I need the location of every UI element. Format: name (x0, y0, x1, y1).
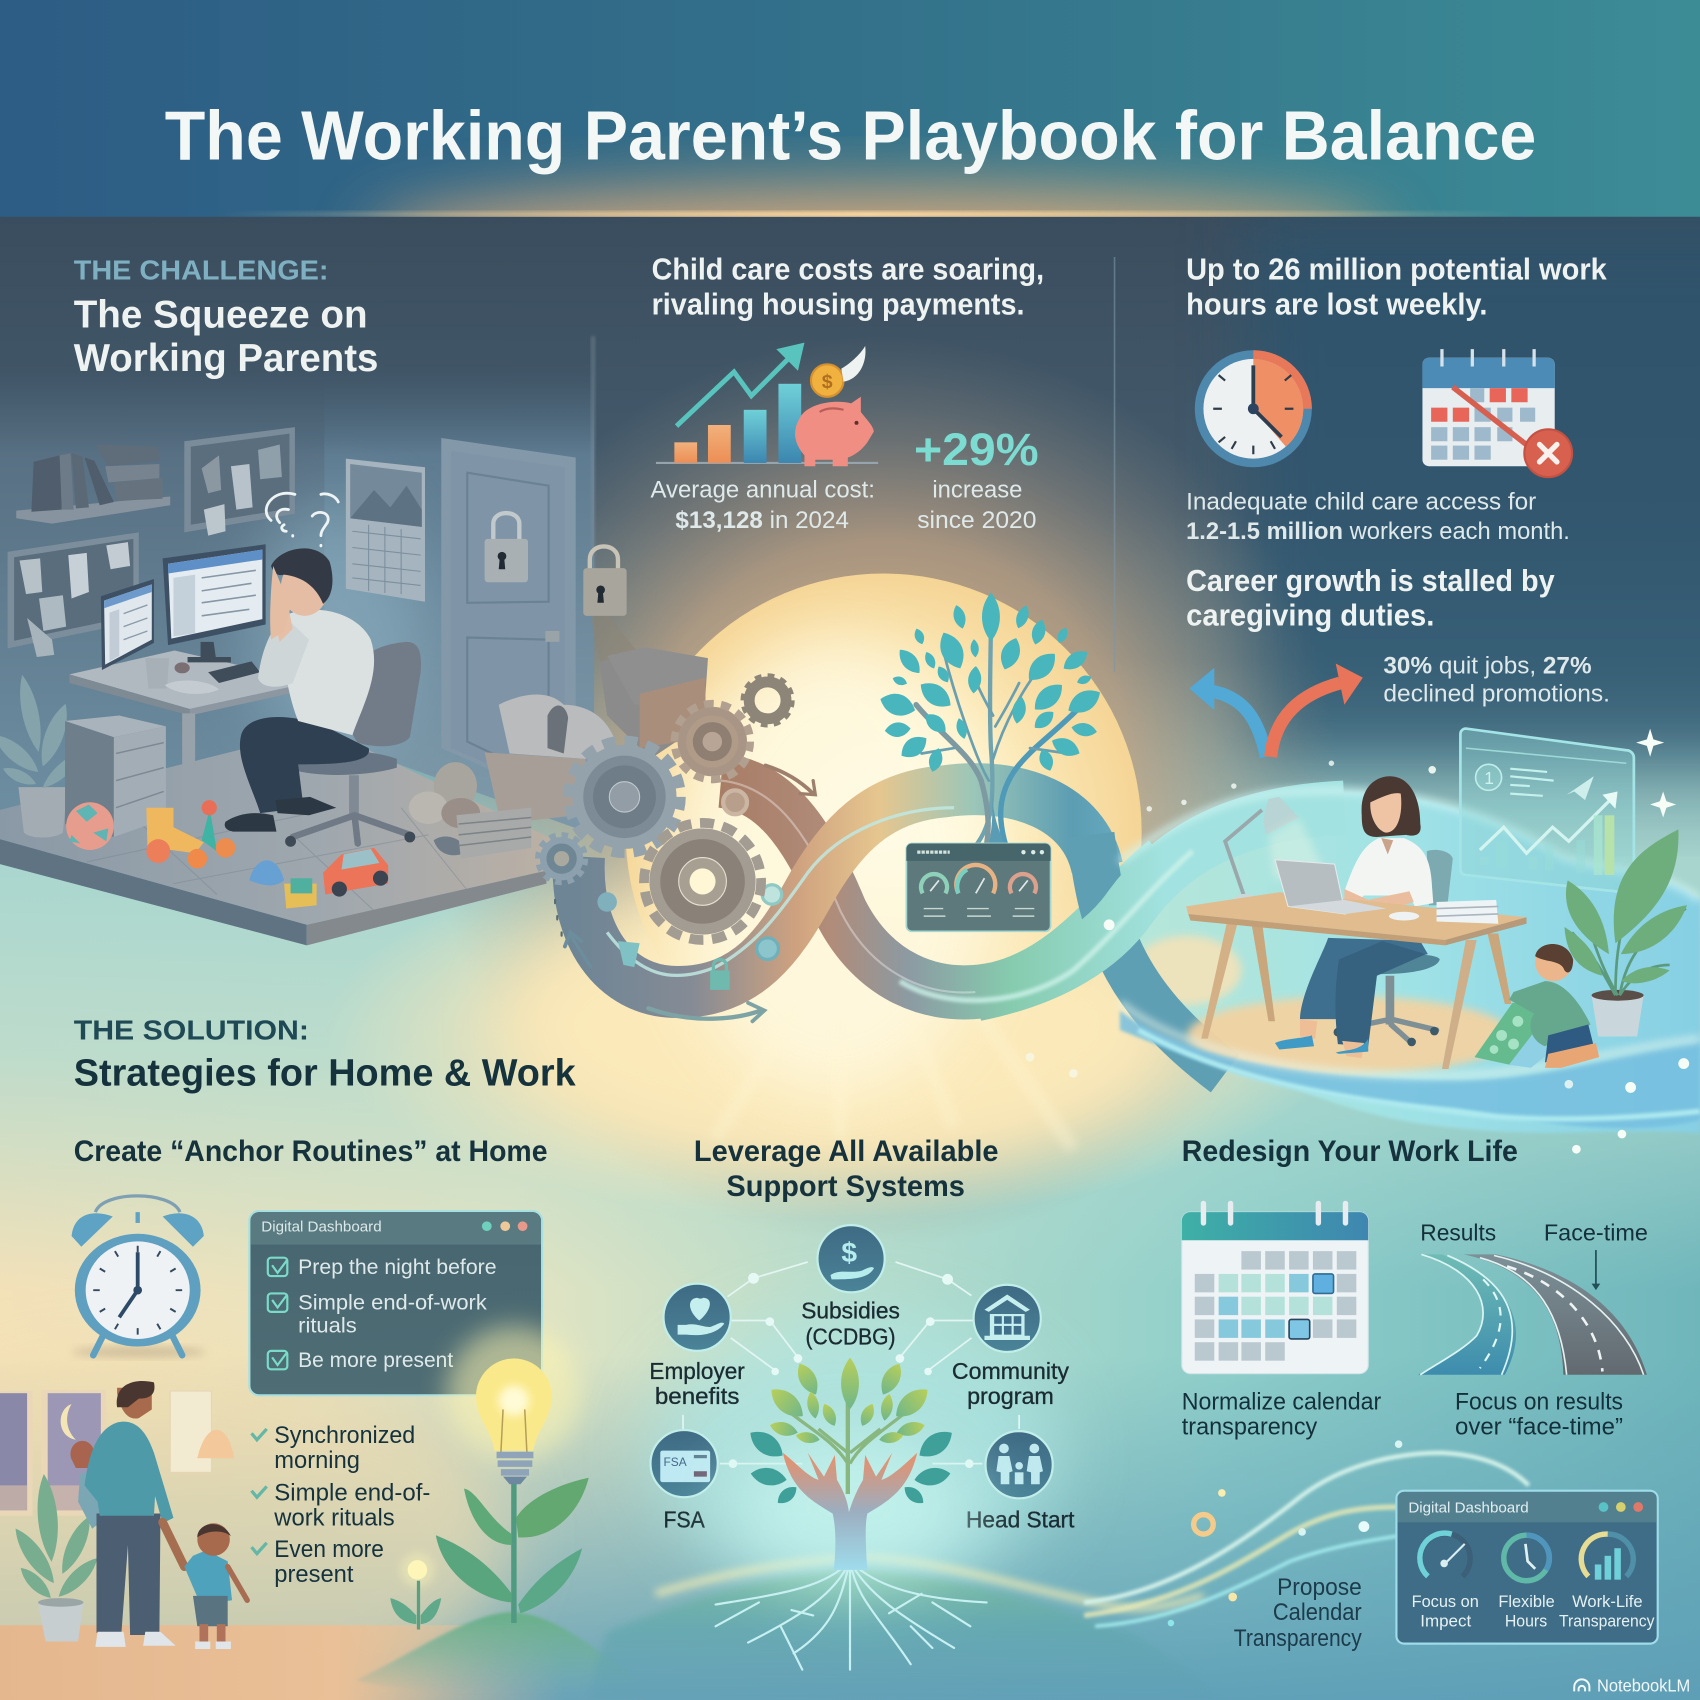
head (281, 559, 329, 616)
increase stat: since 2020 (917, 507, 1036, 534)
solution heading: THE SOLUTION: (74, 1014, 309, 1046)
service labels: Head Start (966, 1507, 1075, 1533)
infinity ribbon (579, 781, 1165, 992)
service labels: program (967, 1383, 1054, 1409)
flow arrows (555, 765, 815, 1021)
shelf with books (16, 445, 170, 524)
wall calendar (346, 459, 425, 602)
teal growth tree (877, 593, 1105, 867)
heading: Up to 26 million potential work (1186, 254, 1607, 287)
bullet list: present (274, 1561, 354, 1588)
torso (283, 610, 374, 735)
filing cabinet (65, 716, 166, 837)
room walls (0, 336, 664, 835)
floor (0, 1625, 564, 1700)
checklist text: Be more present (298, 1347, 453, 1372)
wooden desk (1186, 892, 1527, 1069)
gauge labels: Focus on (1412, 1593, 1479, 1611)
calendar caption: transparency (1182, 1413, 1317, 1440)
connector network (683, 1262, 1019, 1468)
wave background (900, 791, 1700, 1133)
challenge heading (74, 254, 378, 380)
road labels: Results (1420, 1219, 1496, 1245)
service labels (649, 1297, 1075, 1533)
gears cluster (538, 677, 791, 940)
cork board top (184, 427, 295, 536)
legs (1300, 938, 1428, 1019)
icon: alarm clock (72, 1196, 206, 1357)
left potted plant (9, 1473, 103, 1641)
checklist text: rituals (298, 1312, 357, 1337)
gauge labels (1412, 1593, 1655, 1630)
flowing light wave (1084, 1440, 1529, 1626)
floor (0, 729, 555, 945)
increase stat (914, 424, 1039, 534)
scene: stressed parent home office (0, 336, 708, 945)
hex nut (723, 790, 747, 814)
icon: FSA card: FSA (664, 1455, 687, 1469)
bullet list: Even more (274, 1536, 384, 1563)
icon: FSA card (651, 1430, 718, 1497)
stat: career growth (1186, 565, 1610, 757)
bullet list: Simple end-of- (274, 1480, 430, 1507)
increase stat: increase (932, 477, 1022, 504)
scene: balanced parent on flowing wave (900, 729, 1700, 1154)
icon: Head Start family (986, 1431, 1053, 1498)
service labels: Community (952, 1358, 1070, 1384)
challenge heading: THE CHALLENGE: (74, 254, 329, 286)
gauge labels: Work-Life (1572, 1593, 1643, 1611)
panel title: Digital Dashboard (261, 1219, 382, 1236)
bullet list: work rituals (273, 1504, 395, 1531)
service labels: Employer (649, 1358, 745, 1384)
head (1362, 776, 1421, 837)
column: support systems (585, 1136, 1225, 1700)
gauge: focus (1420, 1533, 1470, 1576)
propose caption: Calendar (1273, 1599, 1362, 1626)
chair (1427, 850, 1453, 905)
panel title: Digital Dashboard (1408, 1499, 1529, 1516)
chair (348, 642, 421, 746)
window buttons (1599, 1502, 1643, 1512)
arm (258, 616, 309, 687)
quit caption (1383, 652, 1610, 707)
increase stat: +29% (914, 424, 1039, 475)
icon: bar chart with piggy bank: $ (822, 371, 833, 393)
road labels: Face-time (1544, 1219, 1648, 1245)
heading: Career growth is stalled by (1186, 565, 1555, 598)
window buttons (482, 1221, 527, 1231)
window and wall art (0, 1390, 234, 1516)
gear small blue grey (538, 835, 585, 883)
heading: Support Systems (726, 1171, 965, 1203)
icon: diverging roads (1418, 1250, 1647, 1375)
heading: Redesign Your Work Life (1182, 1136, 1518, 1168)
playing child with tablet (1474, 944, 1599, 1068)
gauge labels: Impect (1420, 1612, 1472, 1630)
service labels: benefits (655, 1383, 739, 1409)
father and children (70, 1381, 247, 1649)
pile of clutter (409, 647, 708, 859)
header band (0, 0, 1700, 217)
cost caption: Average annual cost: (651, 477, 875, 504)
gauge: flexible hours (1504, 1535, 1549, 1581)
calendar caption: Normalize calendar (1182, 1388, 1381, 1415)
quit caption: 30% quit jobs, 27% (1383, 652, 1592, 679)
baby held on hip (70, 1441, 94, 1468)
icon: light bulb plant (356, 1326, 640, 1693)
icon: bar chart with piggy bank (656, 343, 878, 466)
toys on floor (66, 800, 468, 909)
challenge heading: The Squeeze on (74, 293, 368, 336)
gear large grey (568, 740, 681, 853)
heading: caregiving duties. (1186, 600, 1434, 633)
confused signal and question mark (266, 493, 338, 546)
tree with hands and roots (716, 1358, 987, 1670)
divider (1114, 257, 1116, 672)
heading: Leverage All Available (694, 1136, 999, 1168)
sparkles (1026, 729, 1689, 1154)
cost caption: $13,128 in 2024 (675, 507, 849, 534)
access caption: Inadequate child care access for (1186, 489, 1536, 516)
mini dashboard gauges on ribbon (906, 843, 1051, 931)
heading: Create “Anchor Routines” at Home (74, 1136, 548, 1168)
cost caption (651, 477, 875, 534)
heading: Child care costs are soaring, (652, 254, 1044, 287)
bullet list (252, 1422, 430, 1588)
solution heading: Strategies for Home & Work (74, 1052, 577, 1094)
door with padlock (441, 438, 576, 808)
column: redesign work life (1084, 1136, 1658, 1652)
service labels: (CCDBG) (806, 1323, 896, 1349)
icon: subsidies: $ (841, 1236, 857, 1268)
woman at desk (1275, 776, 1453, 1058)
challenge heading: Working Parents (74, 337, 378, 380)
desk items (145, 658, 260, 694)
service labels: FSA (664, 1507, 705, 1533)
gauge labels: Hours (1505, 1612, 1547, 1630)
father (96, 1514, 160, 1635)
child (184, 1550, 232, 1605)
stat: lost work hours (1186, 254, 1607, 545)
gear medium tan (674, 704, 750, 780)
road caption: over “face-time” (1455, 1413, 1623, 1440)
road caption: Focus on results (1455, 1388, 1623, 1415)
laptop and books (1275, 860, 1498, 924)
plant left (0, 673, 88, 838)
propose caption (1234, 1574, 1362, 1652)
bullet list: morning (274, 1447, 360, 1474)
quit caption: declined promotions. (1383, 680, 1610, 707)
solution heading (74, 1014, 577, 1094)
title: The Working Parent’s Playbook for Balance (165, 96, 1536, 174)
icon: subsidies (817, 1225, 885, 1292)
heading (652, 254, 1044, 321)
floating chart screen (1460, 729, 1634, 893)
sun glow behind infinity ribbon (325, 336, 1344, 1247)
panel: digital dashboard checklist (249, 1211, 542, 1395)
desk (69, 651, 312, 832)
gear small floating (744, 677, 791, 724)
checkboxes (268, 1258, 287, 1369)
road labels (1420, 1219, 1648, 1245)
heading: rivaling housing payments. (652, 288, 1025, 321)
floating chart screen: 1 (1484, 768, 1494, 788)
panel: digital dashboard gauges (1396, 1491, 1658, 1644)
padlock on wall edge (583, 546, 627, 616)
icon: community program (974, 1285, 1041, 1352)
service labels: Subsidies (801, 1297, 900, 1323)
legs (240, 717, 369, 813)
stressed man in chair (225, 548, 421, 847)
heading (1186, 254, 1607, 321)
heading (694, 1136, 999, 1203)
road caption (1455, 1388, 1623, 1440)
propose caption: Propose (1277, 1574, 1362, 1601)
big monitor (163, 544, 266, 662)
icon: diverging arrows (1189, 664, 1363, 757)
green plant (1564, 829, 1687, 1036)
small monitor (101, 579, 154, 670)
gauge: work-life (1581, 1534, 1633, 1576)
propose caption: Transparency (1234, 1625, 1362, 1652)
checklist text: Simple end-of-work (298, 1290, 487, 1315)
gauge labels: Transparency (1559, 1612, 1655, 1630)
checklist text (298, 1254, 497, 1372)
icon: employer benefits (664, 1284, 731, 1351)
gear large tan (644, 823, 761, 940)
access caption (1186, 489, 1570, 545)
stat: child care costs (651, 254, 1044, 534)
torso (1344, 838, 1433, 906)
hill and glow (585, 1431, 1225, 1700)
bullet list: Synchronized (274, 1422, 415, 1449)
icon: clock (1195, 350, 1312, 467)
desk lamp (1225, 797, 1328, 905)
column: anchor routines (0, 1136, 640, 1700)
heading (1186, 565, 1555, 633)
calendar caption (1182, 1388, 1381, 1440)
icon: transparency calendar (1182, 1203, 1368, 1374)
NotebookLM watermark: NotebookLM (1597, 1675, 1690, 1695)
checklist text: Prep the night before (298, 1254, 497, 1279)
access caption: 1.2-1.5 million workers each month. (1186, 518, 1570, 545)
gauge labels: Flexible (1498, 1593, 1555, 1611)
cork board lower (8, 532, 139, 657)
heading: hours are lost weekly. (1186, 288, 1488, 321)
icon: calendar with cross (1422, 349, 1572, 477)
